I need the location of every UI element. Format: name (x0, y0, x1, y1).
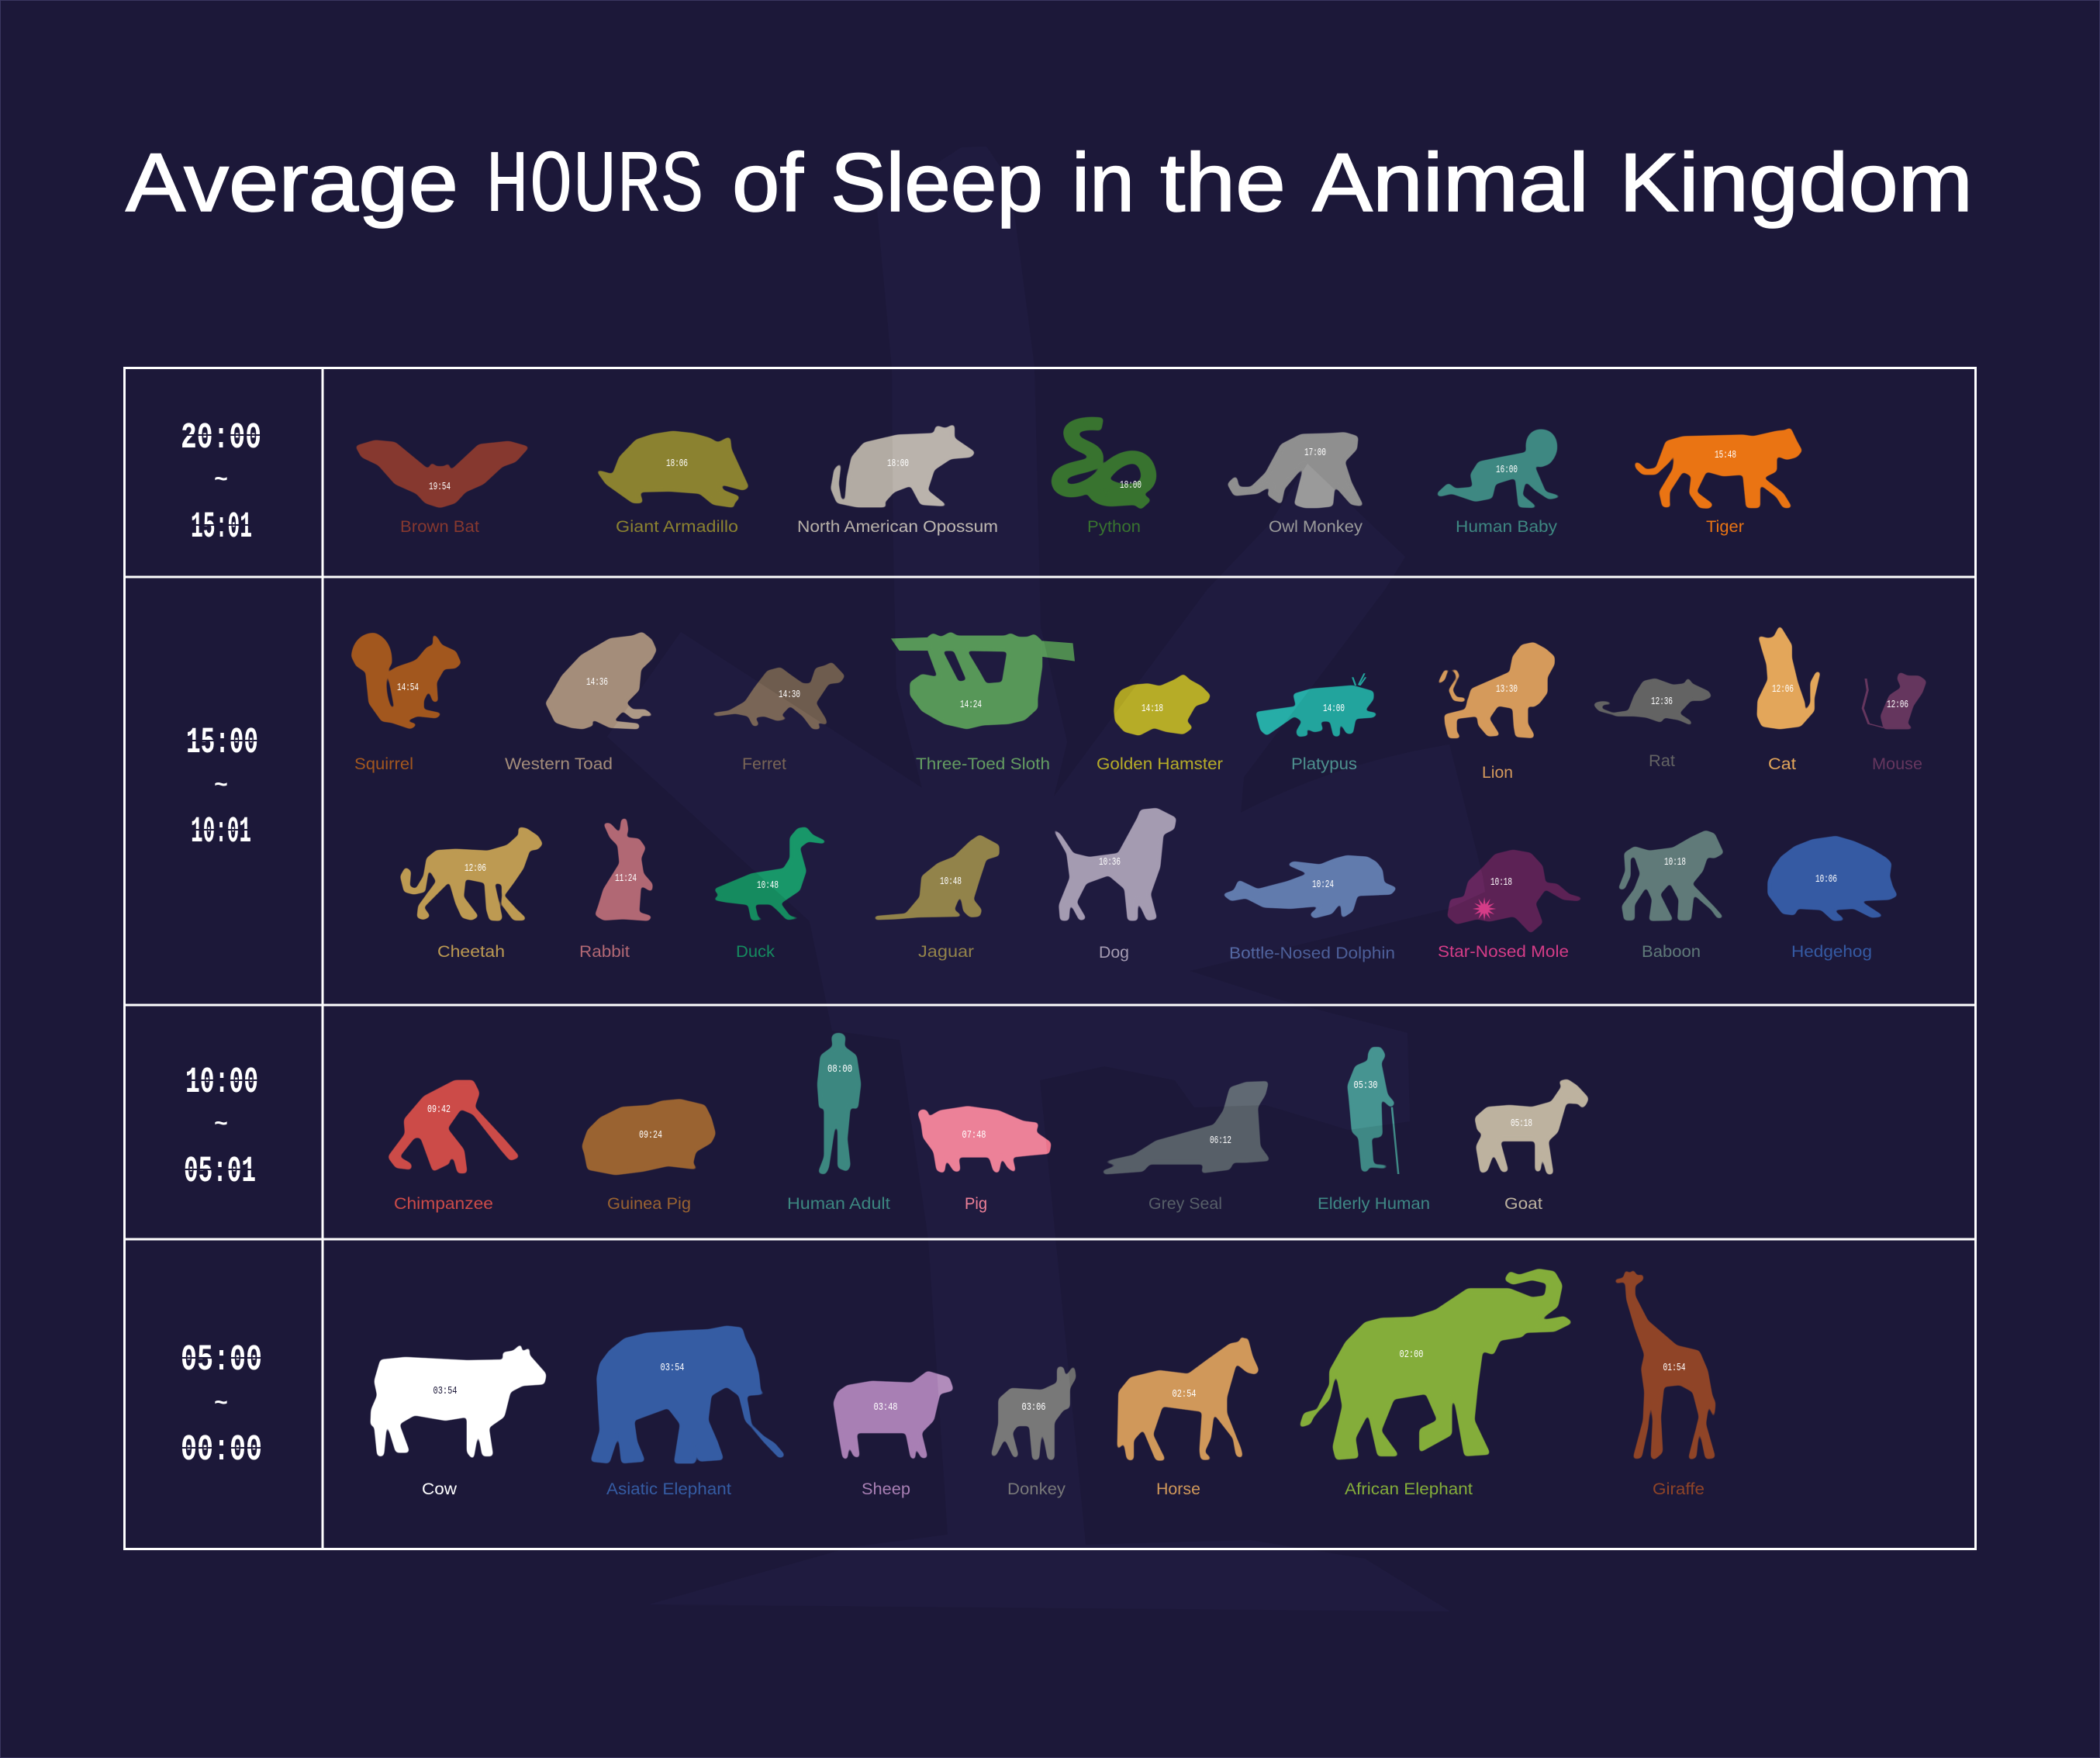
animal: Baboon (1618, 831, 1723, 961)
title: in (1072, 136, 1135, 229)
animal: North American Opossum: North American Opossum (797, 517, 998, 536)
animal: Python (1059, 423, 1148, 536)
animal: Pig: 07:48 (962, 1129, 986, 1141)
animal: Ferret (711, 662, 844, 773)
animal: Giant Armadillo (596, 431, 748, 536)
panel: row 20:00 to 15:01 (177, 418, 1802, 548)
animal: North American Opossum (797, 424, 998, 536)
time range label: 05:01 (184, 1152, 256, 1193)
animal: Giraffe: Giraffe (1653, 1480, 1705, 1498)
animal: Human Adult: Human Adult (787, 1194, 890, 1213)
animal: Ferret: Ferret (742, 755, 786, 773)
animal: Platypus: 14:00 (1323, 703, 1345, 715)
animal: Cat: 12:06 (1772, 683, 1794, 696)
time range label: ~ (214, 1391, 228, 1418)
animal: Cheetah: 12:06 (465, 862, 486, 875)
animal: Guinea Pig (582, 1100, 716, 1213)
animal: Rabbit (579, 818, 652, 961)
animal: African Elephant: African Elephant (1345, 1480, 1473, 1498)
animal: Sheep (834, 1371, 953, 1498)
animal: Elderly Human: Elderly Human (1318, 1194, 1430, 1213)
animal: Mouse: Mouse (1872, 755, 1922, 773)
animal: Cheetah: Cheetah (437, 942, 505, 961)
animal: Human Baby (1437, 430, 1563, 536)
animal: Squirrel (351, 633, 461, 773)
animal: Guinea Pig: 09:24 (639, 1129, 662, 1141)
animal: Human Adult (787, 1033, 890, 1213)
animal: African Elephant (1300, 1269, 1573, 1498)
animal: Python: Python (1087, 517, 1141, 536)
time range label: 05:00 (181, 1340, 262, 1381)
animal: Mouse (1863, 672, 1926, 773)
animal: Star-Nosed Mole (1438, 850, 1583, 961)
animal: Platypus: Platypus (1291, 755, 1357, 773)
animal: Cow: 03:54 (433, 1385, 458, 1397)
animal: Lion: Lion (1482, 763, 1513, 782)
animal: Asiatic Elephant: 03:54 (661, 1362, 684, 1374)
animal: Hedgehog: Hedgehog (1791, 942, 1872, 961)
animal: Human Baby: Human Baby (1456, 517, 1557, 536)
animal: Lion (1437, 642, 1554, 782)
time range label: ~ (214, 773, 228, 800)
time range label: 00:00 (181, 1430, 262, 1471)
animal: Grey Seal: Grey Seal (1148, 1194, 1222, 1213)
animal: Golden Hamster (1097, 674, 1223, 773)
time range label: 20:00 (181, 418, 261, 459)
animal: Chimpanzee: 09:42 (427, 1103, 451, 1116)
animal: Three-Toed Sloth (891, 632, 1075, 773)
animal: Donkey (991, 1365, 1076, 1498)
animal: Pig (918, 1107, 1051, 1213)
animal: Donkey: Donkey (1007, 1480, 1066, 1498)
animal: Chimpanzee (388, 1080, 520, 1213)
animal: Duck: Duck (736, 942, 775, 961)
title: Average (126, 136, 458, 229)
animal: Donkey: 03:06 (1022, 1401, 1045, 1414)
animal: Asiatic Elephant (591, 1326, 786, 1498)
background watermark silhouette (607, 147, 1485, 1611)
animal: Baboon: 10:18 (1664, 856, 1686, 869)
animal: Platypus (1256, 673, 1377, 773)
animal: Mouse: 12:06 (1887, 699, 1908, 711)
animal: Squirrel: Squirrel (354, 755, 413, 773)
animal: Jaguar: 10:48 (940, 876, 962, 888)
animal: Tiger (1635, 427, 1802, 536)
animal: Owl Monkey: 17:00 (1304, 447, 1326, 459)
animal: Brown Bat: 19:54 (429, 481, 451, 493)
animal: Guinea Pig: Guinea Pig (607, 1194, 691, 1213)
animal: Horse: 02:54 (1173, 1388, 1196, 1401)
title: Sleep (831, 136, 1043, 229)
animal: African Elephant: 02:00 (1399, 1349, 1424, 1361)
title: HOURS (485, 136, 704, 238)
animal: Giraffe (1615, 1269, 1715, 1498)
animal: Cat: Cat (1768, 755, 1796, 773)
animal: Western Toad: 14:36 (586, 676, 608, 689)
animal: Star-Nosed Mole: Star-Nosed Mole (1438, 942, 1569, 961)
animal: Hedgehog (1768, 836, 1898, 961)
animal: Python: 18:00 (1120, 479, 1142, 492)
animal: Lion: 13:30 (1496, 683, 1518, 696)
animal: Cow: Cow (422, 1480, 457, 1498)
animal: Dog: Dog (1099, 943, 1129, 962)
animal: Western Toad (505, 632, 656, 773)
time range label (181, 723, 262, 853)
animal: Owl Monkey (1228, 433, 1363, 536)
animal: Sheep: 03:48 (873, 1401, 898, 1414)
animal: Cheetah (400, 827, 543, 961)
animal: Three-Toed Sloth: Three-Toed Sloth (916, 755, 1050, 773)
animal: Ferret: 14:30 (779, 689, 800, 701)
animal: Pig: Pig (965, 1194, 987, 1213)
table grid (124, 368, 1976, 1549)
time range label: 15:01 (191, 507, 252, 548)
animal: Brown Bat: Brown Bat (400, 517, 479, 536)
animal: Giant Armadillo: Giant Armadillo (616, 517, 738, 536)
animal: Owl Monkey: Owl Monkey (1269, 517, 1363, 536)
animal: Chimpanzee: Chimpanzee (394, 1194, 493, 1213)
animal: Tiger: Tiger (1706, 517, 1744, 536)
animal: Giant Armadillo: 18:06 (666, 458, 688, 470)
time range label: ~ (214, 468, 228, 494)
time range label: 15:00 (186, 723, 258, 764)
animal: Brown Bat (356, 440, 529, 536)
time range label (177, 418, 265, 548)
animal: Bottle-Nosed Dolphin: 10:24 (1312, 879, 1334, 891)
animal: Golden Hamster: Golden Hamster (1097, 755, 1223, 773)
animal: Tiger: 15:48 (1715, 449, 1736, 461)
animal: Goat: Goat (1504, 1194, 1542, 1213)
animal: Golden Hamster: 14:18 (1142, 703, 1163, 715)
animal: Rabbit: 11:24 (615, 872, 637, 885)
animal: Rabbit: Rabbit (579, 942, 630, 961)
title: Kingdom (1619, 136, 1973, 229)
animal: Elderly Human: 05:30 (1354, 1079, 1377, 1092)
animal: Grey Seal: 06:12 (1210, 1135, 1231, 1147)
panel: row 10:00 to 05:01 (179, 1033, 1589, 1213)
animal: Giraffe: 01:54 (1663, 1362, 1686, 1374)
animal: Duck: 10:48 (757, 879, 779, 892)
animal: Cat (1757, 626, 1820, 773)
animal: Bottle-Nosed Dolphin: Bottle-Nosed Dolphin (1229, 944, 1395, 962)
title (126, 136, 1973, 238)
animal: Rat: Rat (1649, 751, 1675, 770)
animal: Goat: 05:18 (1511, 1117, 1532, 1130)
time range label: 10:00 (185, 1062, 258, 1103)
title: Animal (1312, 136, 1589, 229)
time range label: ~ (214, 1112, 228, 1138)
animal: Three-Toed Sloth: 14:24 (960, 699, 982, 711)
title: the (1160, 136, 1286, 229)
animal: Squirrel: 14:54 (397, 682, 419, 694)
title: of (732, 136, 803, 229)
animal: Duck (713, 827, 826, 961)
animal: Jaguar: Jaguar (918, 942, 974, 961)
animal: Grey Seal (1101, 1082, 1270, 1213)
animal: Goat (1475, 1079, 1589, 1213)
animal: Baboon: Baboon (1642, 942, 1701, 961)
animal: Bottle-Nosed Dolphin (1223, 855, 1397, 962)
animal: Human Baby: 16:00 (1496, 464, 1518, 476)
panel: row 15:00 to 10:01 (181, 626, 1926, 962)
animal: Rat (1594, 677, 1711, 770)
animal: Sheep: Sheep (862, 1480, 910, 1498)
animal: Cow (371, 1344, 546, 1498)
time range label (179, 1062, 263, 1193)
animal: Western Toad: Western Toad (505, 755, 613, 773)
animal: Jaguar (875, 835, 999, 961)
animal: Rat: 12:36 (1651, 696, 1673, 708)
animal: Horse (1117, 1335, 1259, 1498)
time range label: 10:01 (191, 812, 251, 853)
animal: Human Adult: 08:00 (827, 1063, 852, 1076)
animal: Elderly Human (1318, 1048, 1430, 1213)
animal: Asiatic Elephant: Asiatic Elephant (606, 1480, 731, 1498)
animal: Dog: 10:36 (1099, 856, 1121, 869)
animal: North American Opossum: 18:00 (887, 458, 909, 470)
animal: Dog (1052, 808, 1176, 962)
time range label (176, 1340, 267, 1471)
animal: Hedgehog: 10:06 (1815, 873, 1837, 886)
animal: Horse: Horse (1156, 1480, 1200, 1498)
icon: pink star nose (1473, 897, 1496, 920)
panel: row 05:00 to 00:00 (176, 1269, 1715, 1498)
animal: Star-Nosed Mole: 10:18 (1490, 876, 1512, 889)
